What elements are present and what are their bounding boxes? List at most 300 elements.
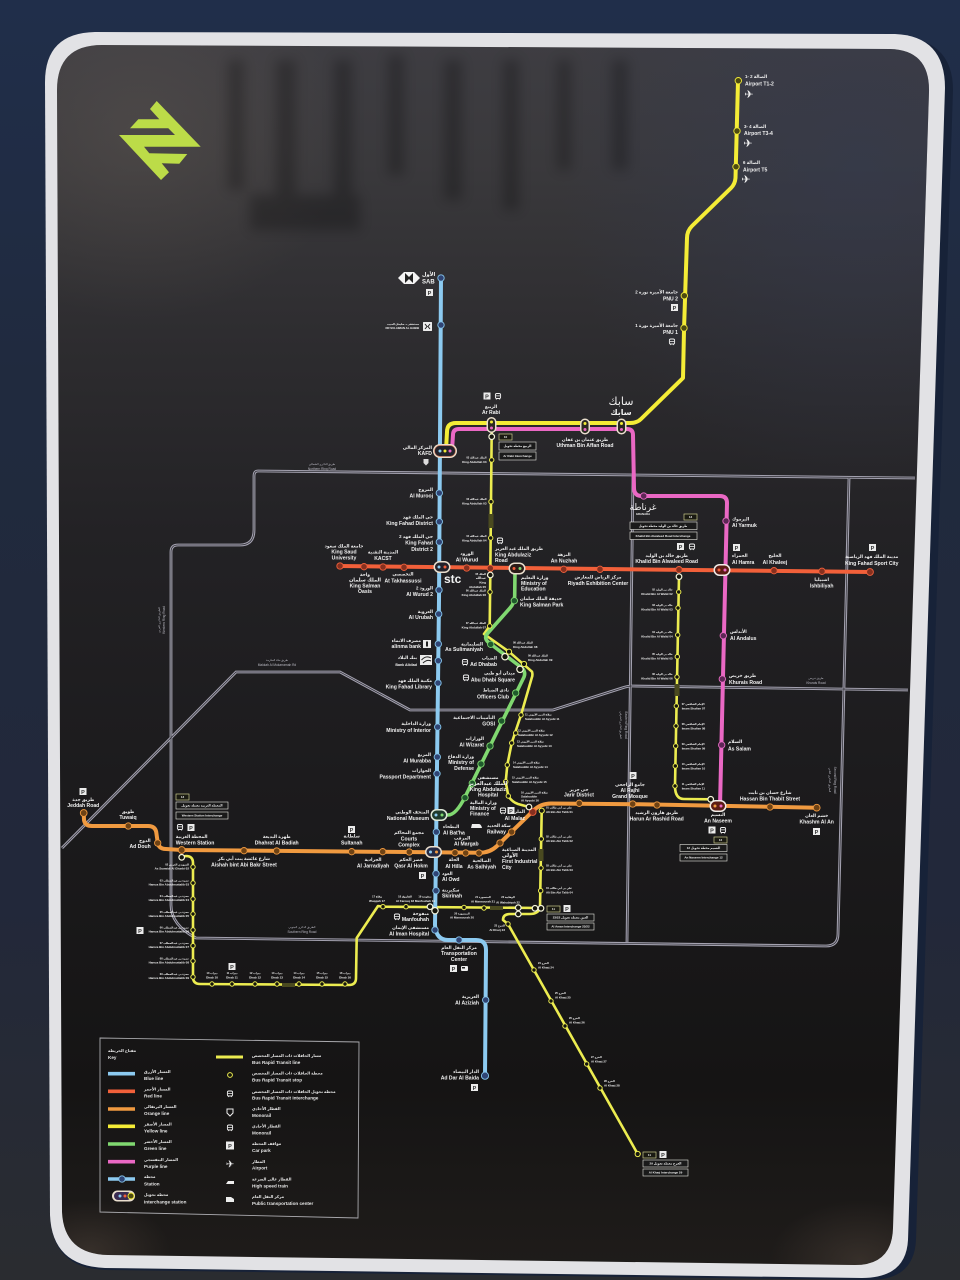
key: interchange station symbol bbox=[112, 1190, 135, 1202]
blue line station labels bbox=[379, 487, 479, 1082]
interchange: Ministry of Education bbox=[508, 562, 526, 574]
logo: SABIC: سابك bbox=[609, 396, 633, 408]
red line station labels: KACST bbox=[374, 556, 393, 562]
green line labels: GOSI bbox=[482, 722, 496, 728]
Khalid interchange boxes: طريق خالد بن الوليد محطة تحويل bbox=[639, 524, 687, 528]
green line labels: Al Wizarat bbox=[459, 742, 484, 748]
blue line station labels: مصرف الانماء bbox=[392, 638, 421, 643]
Al Kharj terminus interchange boxes: الخرج محطة تحويل 29 bbox=[650, 1162, 681, 1166]
Ar Rabi labels and interchange bbox=[482, 392, 536, 460]
key: left column labels: محطة تحويل bbox=[144, 1192, 169, 1197]
Khalid BRT labels: 02 خالد بن الوليد bbox=[652, 588, 673, 592]
SAB label and logo: SAB bbox=[422, 280, 435, 286]
blue line station labels: King Fahad bbox=[405, 540, 433, 546]
King Abdullah BRT labels: 05 الملك bbox=[475, 572, 486, 576]
red line station labels: وزارة التعليم bbox=[521, 575, 549, 580]
Khalid BRT labels: Khalid Bin Al Walid 04 bbox=[641, 634, 673, 638]
key: right column labels: المطار bbox=[251, 1159, 266, 1164]
road labels: Makkah Al Mukarramah Rd bbox=[258, 663, 296, 667]
orange line labels centre: النسيم bbox=[711, 812, 726, 817]
green line labels bbox=[445, 642, 515, 818]
orange line labels centre: حي جرير bbox=[568, 787, 589, 792]
orange line labels centre: City bbox=[502, 865, 512, 871]
red line station labels: حديقة الملك سلمان bbox=[520, 596, 562, 601]
interchange: KAFD bbox=[433, 444, 457, 458]
Salahuddin BRT labels: 15 صلاح الدين الأيوبي bbox=[512, 776, 539, 780]
orange line labels centre: سكة الحديد bbox=[487, 823, 511, 828]
Dr Sulaiman Al Habib label: مستشفى د. سليمان الحبيب bbox=[387, 323, 420, 326]
Ar Rabi labels and interchange: Ar Rabi bbox=[482, 410, 501, 416]
interchange: Uthman Bin Affan Road bbox=[580, 418, 590, 434]
purple line bbox=[452, 429, 729, 807]
blue line station labels: المتحف الوطني bbox=[395, 810, 429, 814]
King Abdullah BRT labels: 06 الملك عبدالله bbox=[466, 588, 486, 592]
icon: Transport Center parking and bus: P bbox=[452, 967, 456, 973]
icon: Transport Center parking and bus bbox=[450, 965, 468, 973]
purple line labels: Al Yarmuk bbox=[732, 523, 757, 529]
Hamza BRT labels: Hamza Bin Abdulmuttalib 09 bbox=[149, 976, 189, 980]
south BRT labels: 28 الخرج bbox=[604, 1079, 615, 1083]
green line labels: ميدان أبو ظبي bbox=[484, 670, 515, 676]
key: left column labels: محطة bbox=[144, 1174, 156, 1179]
red line station labels: جامعة الملك سعود bbox=[325, 544, 363, 548]
interchange: Qasr Al Hokm bbox=[425, 846, 442, 858]
south BRT labels: Wuqqah 17 bbox=[369, 899, 385, 903]
Khalid BRT labels: Khalid Bin Al Walid 06 bbox=[641, 676, 673, 680]
King Abdullah BRT labels: King Abdullah 06 bbox=[462, 593, 486, 597]
Hamza BRT labels: Hamza Bin Abdulmuttalib 08 bbox=[149, 960, 189, 964]
key: left column labels: Red line bbox=[144, 1094, 162, 1098]
red line station labels: Ishbiliyah bbox=[810, 584, 833, 590]
BRT tiny line tags bbox=[282, 514, 680, 987]
green line labels: الوزارات bbox=[466, 736, 484, 741]
Al Aman interchange boxes bbox=[547, 905, 594, 930]
purple line labels: اليرموك bbox=[732, 516, 750, 522]
key: right column labels: القطار الأحادي bbox=[252, 1106, 281, 1111]
icon: Al Hamra parking: P bbox=[735, 546, 739, 552]
south BRT labels: 23 الخرج bbox=[494, 924, 505, 928]
Western Station interchange boxes: Western Station Interchange bbox=[182, 814, 223, 818]
orange line labels centre: جامع الراجحي bbox=[615, 782, 645, 787]
south BRT labels: Al Mansourah 21 bbox=[471, 900, 495, 904]
King Abdullah BRT labels: King Abdullah 09 bbox=[528, 658, 553, 662]
Khalid BRT labels: 09 الإمام الشافعي bbox=[682, 742, 705, 746]
Salahuddin BRT labels: Salahuddin Al Ayyubi 14 bbox=[513, 765, 548, 769]
blue line station labels: District 2 bbox=[411, 547, 433, 553]
red line station labels: Oasis bbox=[358, 589, 372, 595]
orange line labels west: Sultanah bbox=[341, 840, 362, 846]
road labels: الطريق الدائري الشرقي bbox=[619, 711, 622, 739]
SAB label and logo: الأول bbox=[422, 271, 436, 278]
red line station labels: واحة bbox=[360, 572, 370, 577]
Dirab BRT labels: 12 ديراب bbox=[250, 971, 261, 975]
key: left column labels: Station bbox=[144, 1182, 160, 1186]
red line station labels: Khalid Bin Alwaleed Road bbox=[635, 559, 698, 565]
red line station labels: Al Hamra bbox=[732, 560, 755, 566]
south BRT labels: Al Kharj 26 bbox=[569, 1020, 585, 1024]
logo: Granada: GRANADA bbox=[636, 512, 650, 516]
key: left column labels: المسار الأصفر bbox=[143, 1122, 172, 1126]
key: right column labels: Monorail bbox=[252, 1130, 271, 1136]
blue line station labels: alinma bank bbox=[392, 644, 421, 650]
King Abdullah BRT labels: King bbox=[479, 580, 486, 584]
blue line station labels: بنك البلاد bbox=[398, 655, 417, 660]
green line labels: Ministry of bbox=[448, 760, 474, 766]
interchange: SABIC bbox=[616, 418, 626, 434]
south BRT labels: Ali Bin Abi Talib 04 bbox=[546, 890, 573, 894]
orange line labels centre: Harun Ar Rashid Road bbox=[630, 816, 684, 822]
Hamza BRT labels: 05 حمزة بن عبدالمطلب bbox=[160, 910, 189, 914]
key: right column labels: القطار الأحادي bbox=[252, 1124, 281, 1128]
King Abdullah BRT labels: King Abdullah 07 bbox=[462, 626, 486, 630]
green line labels: Finance bbox=[470, 812, 489, 818]
key: left column labels: المسار الأخضر bbox=[143, 1139, 172, 1144]
Khalid BRT labels: 05 خالد بن الوليد bbox=[652, 652, 673, 656]
Ar Rabi labels and interchange: P bbox=[485, 394, 489, 400]
orange line labels centre: Railway bbox=[487, 830, 506, 836]
icon: Al Rajhi parking bbox=[630, 772, 636, 780]
Khalid BRT labels: 11 الإمام الشافعي bbox=[682, 782, 704, 786]
airport labels: ✈ bbox=[743, 137, 753, 150]
icon: Manfouhah bus bbox=[394, 914, 400, 920]
Salahuddin BRT labels: 16 صلاح الدين الأيوبي bbox=[521, 790, 548, 794]
Khalid BRT labels: Imam Shafiee 10 bbox=[682, 766, 706, 770]
key: right column labels: مركز النقل العام bbox=[252, 1194, 285, 1199]
Al Kharj terminus interchange boxes bbox=[643, 1151, 688, 1176]
SAB label and logo: P bbox=[428, 291, 432, 297]
Khalid BRT labels: 06 خالد بن الوليد bbox=[652, 672, 673, 676]
Dirab BRT labels: 10 ديراب bbox=[207, 971, 218, 975]
icons: An Naseem parking and bus bbox=[708, 826, 726, 834]
purple line labels: As Salam bbox=[728, 746, 751, 752]
Al Malaz label and icons: الملز bbox=[513, 809, 525, 814]
interchange: Al Hamra bbox=[714, 564, 730, 576]
key: icons column: P bbox=[228, 1144, 232, 1150]
blue line station labels: Al Wurud 2 bbox=[406, 592, 433, 598]
road labels: Second Ring Road bbox=[833, 767, 837, 794]
icon: Ad Dar Al Baida parking bbox=[471, 1084, 478, 1092]
blue line station labels: مكتبة الملك فهد bbox=[398, 678, 432, 683]
south BRT labels: 17 وقاح bbox=[372, 894, 382, 898]
red line station labels bbox=[325, 544, 899, 608]
icon: Al Owd parking: P bbox=[421, 874, 425, 880]
blue line station labels: مركز النقل العام bbox=[441, 945, 477, 950]
red line station labels: Riyadh Exhibition Center bbox=[568, 581, 628, 587]
sponsor: alinma bank icon bbox=[423, 640, 431, 648]
road labels bbox=[158, 463, 837, 934]
road labels: Khurais Road bbox=[806, 681, 826, 685]
key: right column labels: Bus Rapid Transit interchange bbox=[252, 1096, 319, 1100]
road labels: Southern Ring Road bbox=[288, 930, 317, 934]
green line labels: الضباب bbox=[482, 656, 497, 660]
Al Aman interchange boxes: العين محطة تحويل 23/22 bbox=[553, 916, 588, 920]
Khalid BRT labels: Khalid Bin Al Walid 02 bbox=[641, 592, 673, 596]
road labels: طريق خريص bbox=[809, 677, 823, 680]
Dirab BRT labels: Dirab 10 bbox=[206, 976, 218, 980]
key: right column labels: High speed train bbox=[252, 1184, 288, 1188]
blue line station labels: Skirinah bbox=[442, 894, 462, 900]
south BRT labels: 19 منفوحة bbox=[418, 894, 432, 898]
sponsor: stc: stc bbox=[444, 572, 462, 586]
red line station labels: University bbox=[332, 556, 356, 562]
Hamza BRT labels: Hamza Bin Abdulmuttalib 06 bbox=[149, 930, 189, 934]
south BRT labels: Al Kharj 27 bbox=[591, 1060, 607, 1064]
PNU labels bbox=[635, 288, 678, 345]
interchange: An Naseem bbox=[710, 800, 726, 812]
red line station labels: اشبيليا bbox=[814, 577, 829, 582]
An Naseem interchange boxes: An Naseem Interchange 12 bbox=[684, 856, 723, 860]
icons: Western Station bus and parking bbox=[177, 824, 194, 832]
key: right column labels: مواقف المحطة bbox=[252, 1141, 282, 1146]
King Abdullah BRT labels: Abdullah 05 bbox=[469, 585, 486, 589]
Hamza BRT labels: 08 حمزة بن عبدالمطلب bbox=[160, 956, 189, 960]
blue line station labels: Ad Dar Al Baida bbox=[441, 1076, 479, 1082]
blue line station labels: Al Owd bbox=[442, 877, 460, 883]
south BRT labels: 21 المنصورة bbox=[475, 895, 491, 899]
key: left column labels: المسار الأحمر bbox=[143, 1086, 171, 1092]
key: left column labels: المسار الأزرق bbox=[144, 1069, 171, 1074]
PNU labels: PNU 2 bbox=[663, 296, 678, 302]
south BRT labels: Al Kharj 23 bbox=[489, 928, 505, 932]
sponsor: Bank Albilad icon bbox=[420, 655, 432, 665]
south BRT labels: Al Mansourah 20 bbox=[450, 916, 474, 920]
orange line labels west: الدوح bbox=[139, 838, 151, 843]
Ar Rabi labels and interchange: الربيع محطة تحويل bbox=[504, 444, 531, 448]
orange line labels centre: طريق هارون الرشيد bbox=[635, 810, 678, 815]
Khalid BRT labels: 08 الإمام الشافعي bbox=[682, 722, 705, 726]
red line bbox=[337, 563, 873, 575]
orange line labels centre bbox=[357, 782, 834, 871]
blue line station labels: حي الملك فهد bbox=[403, 514, 433, 520]
interchange: National Museum bbox=[430, 809, 448, 821]
Dirab BRT labels: 13 ديراب bbox=[272, 971, 283, 975]
Salahuddin BRT labels: 12 صلاح الدين الأيوبي bbox=[518, 728, 545, 732]
key: icons column bbox=[226, 1073, 234, 1202]
key: left column labels: Green line bbox=[144, 1146, 167, 1151]
red line station labels: النزهة bbox=[557, 552, 571, 557]
green line labels: Ad Dhabab bbox=[470, 662, 497, 668]
key: left column labels: Interchange station bbox=[144, 1200, 187, 1204]
blue line station labels: العروبة bbox=[418, 609, 433, 614]
King Abdullah BRT labels: 03 الملك عبدالله bbox=[466, 456, 487, 460]
key heading: مفتاح الخريطة bbox=[108, 1048, 137, 1053]
south BRT labels: Al Kharj 24 bbox=[538, 966, 554, 970]
red line station labels: طريق خالد بن الوليد bbox=[645, 553, 688, 558]
airport labels: 6 الصالة bbox=[743, 160, 761, 165]
orange line bbox=[80, 800, 820, 856]
Khalid BRT labels: 10 الإمام الشافعي bbox=[682, 762, 705, 766]
blue line station labels: العود bbox=[442, 871, 453, 876]
An Naseem interchange boxes: النسيم محطة تحويل 12 bbox=[687, 846, 720, 850]
key: right column labels: محطة تحويل الحافلات ذات المسار المخصص bbox=[252, 1089, 336, 1094]
key: right column labels: Airport bbox=[252, 1166, 268, 1170]
orange line labels west: Tuwaiq bbox=[119, 815, 137, 821]
green line labels: Hospital bbox=[478, 792, 499, 798]
Dirab BRT labels: Dirab 12 bbox=[249, 976, 261, 980]
Salahuddin BRT labels: Al Ayyubi 16 bbox=[521, 798, 539, 802]
KAFD label: المركز المالي bbox=[403, 445, 432, 450]
airport labels: ✈ bbox=[744, 88, 754, 101]
blue line station labels: المروج bbox=[418, 487, 433, 492]
key: left column labels: Yellow line bbox=[144, 1128, 168, 1134]
key: icons column: ✈ bbox=[226, 1160, 234, 1170]
Dr Sulaiman Al Habib label: DR SULAIMAN AL HABIB bbox=[385, 326, 419, 330]
red line station labels: مركز الرياض للمعارض bbox=[574, 574, 622, 580]
Hamza BRT labels: As Suwaidi Al Gharbi 02 bbox=[155, 866, 189, 870]
BRT stops bbox=[179, 434, 713, 1157]
King Abdullah BRT labels: King Abdullah 08 bbox=[513, 645, 538, 649]
airport labels: ✈ bbox=[741, 173, 751, 186]
orange line labels centre: Al Jarradiyah bbox=[357, 864, 389, 870]
Salahuddin BRT labels: Salahuddin bbox=[521, 794, 537, 798]
Hamza BRT labels: Hamza Bin Abdulmuttalib 04 bbox=[149, 898, 189, 902]
orange line labels centre: المدينة الصناعية bbox=[502, 847, 537, 852]
key: left column labels bbox=[143, 1069, 187, 1204]
blue line station labels: منفوحة bbox=[413, 911, 429, 916]
road labels: الطريق الدائري الغربي bbox=[158, 607, 161, 633]
Hamza BRT labels: 02 السويدي الغربي bbox=[165, 862, 189, 866]
red line station labels: King Salman bbox=[350, 584, 380, 590]
blue line station labels: الورود 2 bbox=[416, 586, 433, 590]
orange line labels centre: Qasr Al Hokm bbox=[394, 864, 428, 870]
red line station labels: Ministry of bbox=[521, 581, 547, 587]
blue line station labels: King Fahad Library bbox=[386, 684, 432, 690]
key: right column labels: Bus Rapid Transit line bbox=[252, 1060, 301, 1065]
key: right column labels bbox=[251, 1053, 336, 1206]
orange line labels centre: Al Hilla bbox=[445, 864, 463, 870]
orange line labels centre: An Naseem bbox=[704, 818, 732, 824]
Salahuddin BRT labels: Salahuddin Al Ayyubi 12 bbox=[518, 733, 553, 737]
Western Station interchange boxes: المحطة الغربية محطة تحويل bbox=[181, 804, 223, 808]
orange line labels west: Dhahrat Al Badiah bbox=[255, 840, 299, 846]
key: BRT line swatch bbox=[216, 1056, 243, 1058]
Dirab BRT labels: 11 ديراب bbox=[227, 971, 238, 975]
orange line labels centre: الأولى bbox=[502, 852, 518, 859]
Dirab BRT labels: Dirab 16 bbox=[339, 976, 351, 980]
south BRT labels: 18 الفاروق bbox=[398, 894, 412, 898]
orange line labels west: المحطة الغربية bbox=[176, 834, 208, 839]
south BRT labels bbox=[369, 806, 620, 1088]
KAFD label bbox=[403, 445, 432, 466]
Khalid interchange boxes bbox=[630, 514, 697, 540]
red line station labels: An Nuzhah bbox=[551, 558, 577, 564]
south BRT labels: 04 علي بن أبي طالب bbox=[546, 886, 572, 890]
Western Station interchange boxes: 13 bbox=[181, 795, 184, 799]
blue line station labels: سكيرينة bbox=[442, 888, 459, 892]
orange line labels west: Aishah bint Abi Bakr Street bbox=[211, 862, 277, 868]
ring roads bbox=[62, 471, 915, 946]
Dirab BRT labels: 14 ديراب bbox=[294, 971, 305, 975]
blue line station labels: Ministry of Interior bbox=[386, 728, 431, 734]
interchange: Blue and red bbox=[434, 561, 450, 573]
logo: SABIC bbox=[609, 396, 633, 417]
Al Kharj terminus interchange boxes: Al Kharj Interchange 29 bbox=[649, 1171, 683, 1175]
orange line labels west: ظهرة البديعة bbox=[263, 834, 291, 839]
King Abdullah BRT labels bbox=[462, 456, 553, 662]
Dirab BRT labels: Dirab 14 bbox=[293, 976, 305, 980]
green line labels: Officers Club bbox=[477, 694, 509, 700]
King Abdullah BRT labels: King Abdullah 03 bbox=[462, 460, 487, 464]
Khalid BRT labels: Khalid Bin Al Walid 03 bbox=[641, 608, 673, 612]
orange line labels centre: الصالحية bbox=[473, 858, 491, 863]
Hamza BRT labels bbox=[149, 862, 189, 980]
PNU labels: PNU 1 bbox=[663, 330, 678, 336]
red line station labels: الورود bbox=[460, 551, 474, 556]
orange line labels centre: قصر الحكم bbox=[399, 857, 423, 862]
red line station labels: طريق الملك عبد العزيز bbox=[494, 546, 543, 551]
blue line station labels: Transportation bbox=[441, 951, 477, 957]
red line station labels: المدينة التقنية bbox=[368, 550, 399, 554]
orange line labels centre: Al Margab bbox=[454, 842, 479, 848]
icons: Khalid Bin Alwaleed parking and bus bbox=[677, 543, 695, 551]
Dr Sulaiman Al Habib label bbox=[385, 322, 432, 331]
King Abdullah BRT labels: 03 الملك عبدالله bbox=[466, 497, 487, 501]
icons: Western Station bus and parking: P bbox=[189, 826, 193, 832]
road labels: الطريق الدائري الثاني bbox=[828, 768, 831, 792]
south BRT labels: 20 المنصورة bbox=[454, 912, 470, 916]
Hamza BRT labels: Hamza Bin Abdulmuttalib 03 bbox=[149, 882, 189, 886]
An Naseem interchange boxes: 12 bbox=[719, 838, 722, 842]
south BRT labels: 01 علي بن أبي طالب bbox=[546, 806, 572, 810]
Salahuddin BRT labels: Salahuddin Al Ayyubi 11 bbox=[525, 717, 560, 721]
blue line station labels: المربع bbox=[418, 752, 431, 757]
airport labels: 3- 4 الصالة bbox=[744, 124, 767, 129]
blue line station labels: Center bbox=[451, 957, 467, 963]
purple line labels: طريق خريص bbox=[729, 673, 756, 678]
south BRT labels: 26 الخرج bbox=[569, 1016, 580, 1020]
panel: key bbox=[100, 1038, 359, 1218]
red line station labels: Education bbox=[521, 586, 546, 592]
purple line labels: الأندلس bbox=[730, 628, 747, 634]
south BRT labels: 27 الخرج bbox=[591, 1055, 602, 1059]
yellow line airport metro bbox=[446, 78, 742, 450]
blue line station labels: الدار البيضاء bbox=[453, 1069, 479, 1074]
orange line labels west bbox=[67, 797, 362, 868]
orange line labels centre: Al Rajhi bbox=[621, 788, 640, 794]
key: right column labels: Car park bbox=[252, 1148, 271, 1153]
key: right column labels: محطة الحافلات ذات المسار المخصص bbox=[252, 1070, 323, 1076]
Khalid BRT labels: 03 خالد بن الوليد bbox=[652, 603, 673, 607]
orange line labels west: Ad Douh bbox=[129, 844, 151, 850]
south BRT labels: Al Farouq 18 bbox=[396, 899, 414, 903]
orange line labels centre: Khashm Al An bbox=[799, 820, 834, 826]
green line labels: Abu Dhabi Square bbox=[471, 678, 515, 684]
Al Kharj terminus interchange boxes: 11 bbox=[648, 1153, 651, 1157]
Dirab BRT labels: Dirab 15 bbox=[316, 976, 328, 980]
red line station labels: Al Khaleej bbox=[763, 560, 788, 566]
red line station labels: الخليج bbox=[768, 553, 782, 558]
road labels: Western Ring Road bbox=[162, 606, 166, 634]
key: right column labels: القطار عالي السرعة bbox=[252, 1176, 292, 1182]
green line labels: مستشفى bbox=[478, 775, 499, 780]
green line labels: الملك عبدالعزيز bbox=[468, 781, 508, 787]
Khalid BRT labels: Khalid Bin Al Walid 05 bbox=[641, 656, 673, 660]
SAB label and logo bbox=[398, 271, 436, 297]
icon: Hamza parking: P bbox=[138, 929, 142, 935]
orange line labels centre: Hassan Bin Thabit Street bbox=[740, 796, 800, 802]
purple line labels: السلام bbox=[728, 739, 743, 744]
orange line labels west: Western Station bbox=[176, 840, 214, 846]
blue line station labels: Al Urubah bbox=[409, 615, 433, 621]
blue line station labels: Manfouhah bbox=[402, 917, 429, 923]
road labels: Northern Ring Road bbox=[308, 467, 336, 471]
Khalid BRT labels: Imam Shafiee 08 bbox=[682, 726, 706, 730]
orange line labels centre: الجرادية bbox=[364, 857, 382, 862]
key: left column labels: Purple line bbox=[144, 1164, 168, 1169]
King Abdullah BRT labels: 08 الملك عبدالله bbox=[513, 640, 533, 644]
road labels: Eastern Ring Road bbox=[624, 712, 628, 739]
green line labels: وزارة الدفاع bbox=[448, 754, 474, 759]
